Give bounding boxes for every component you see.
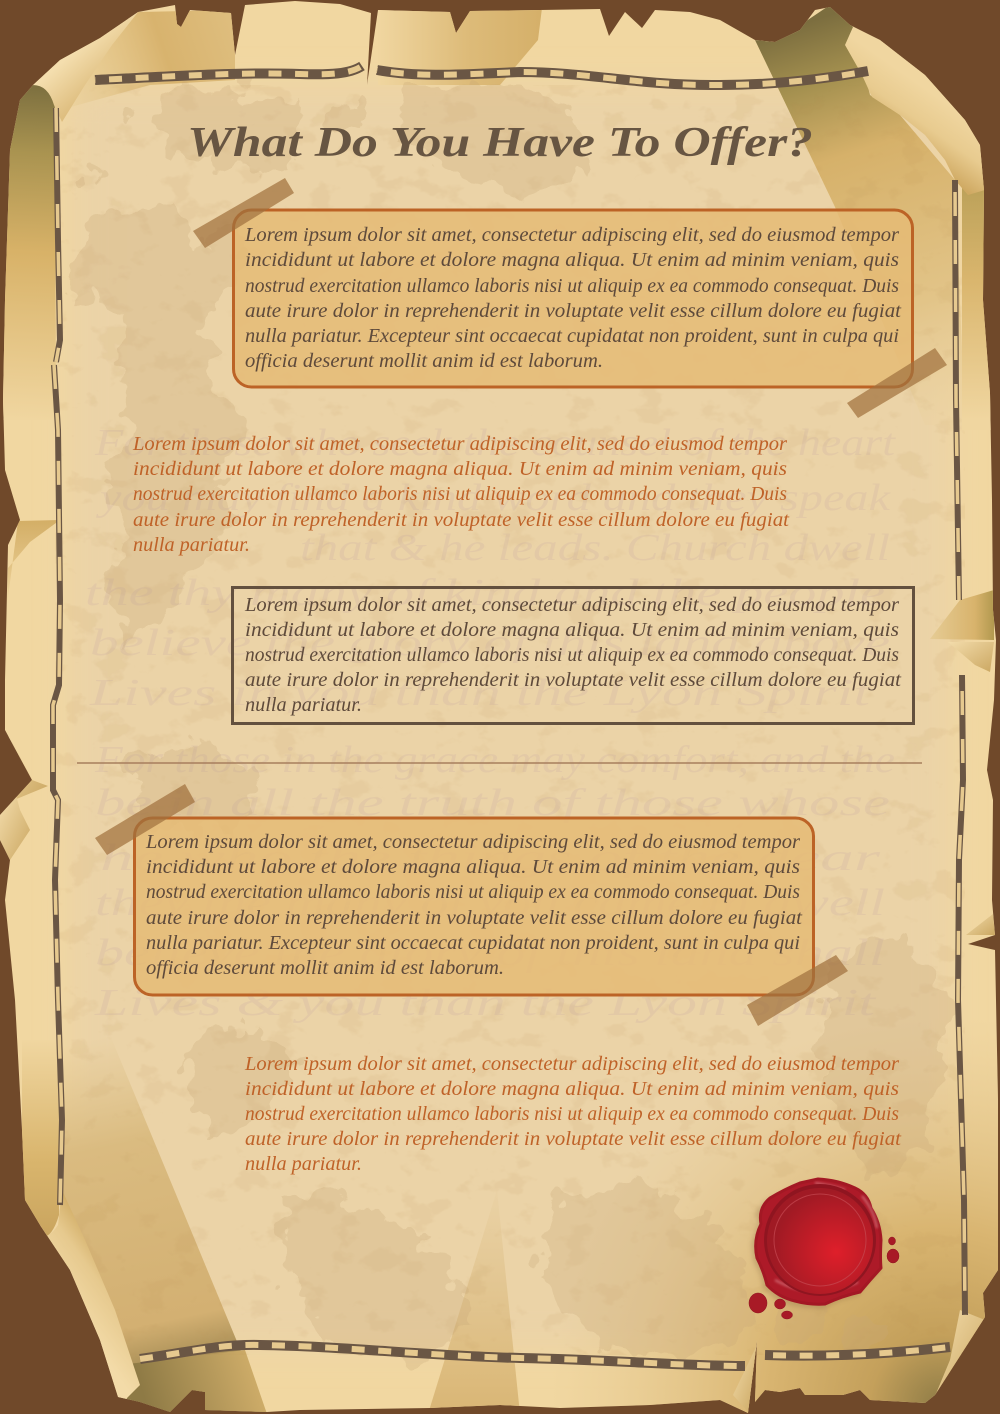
orange text block two: nostrud exercitation ullamco laboris nisi ut aliquip ex ea commodo consequat. Duis [245,1103,899,1125]
stitched border: top right [377,70,868,85]
faint handwriting: believe the glory of this land above [90,622,890,664]
wax highlights [775,1183,877,1292]
faint handwriting: the thy many of kind and the people [85,572,885,614]
faint handwriting: Lives & you than the Lyon Spirit [93,982,877,1024]
left edge fold lower [8,736,48,800]
lower note card [134,818,814,995]
right upper strip [962,180,991,430]
lower note text: officia deserunt mollit anim id est laborum. [146,957,504,979]
orange text block one: aute irure dolor in reprehenderit in voluptate velit esse cillum dolore eu fugiat [133,509,789,531]
panel: lower highlighted note [134,818,814,995]
orange text block two: nulla pariatur. [245,1153,362,1175]
right edge fold [930,590,994,640]
lower note text: Lorem ipsum dolor sit amet, consectetur adipiscing elit, sed do eiusmod tempor [145,831,800,853]
note card [234,210,912,387]
icon: red wax seal [749,1179,899,1319]
stitched border: top left [95,66,362,80]
bottom-left shaded band [63,1060,265,1412]
lower note text: nulla pariatur. Excepteur sint occaecat cupidatat non proident, sunt in culpa qui [146,932,800,954]
top-left page curl [33,12,138,122]
stitched border: bottom right [765,1347,950,1356]
note text: nostrud exercitation ullamco laboris nisi ut aliquip ex ea commodo consequat. Duis [245,275,899,297]
wax body [756,1179,881,1304]
outline [232,588,914,724]
title: What Do You Have To Offer? [187,120,813,166]
top-right dark fold [755,5,965,425]
seal dark ring [764,1184,876,1296]
tape: top note right [847,348,947,418]
outlined note text: incididunt ut labore et dolore magna aliqua. Ut enim ad minim veniam, quis [245,619,899,641]
stitched border: bottom left [140,1345,745,1366]
tape: lower note left [95,784,195,855]
lower note text: incididunt ut labore et dolore magna aliqua. Ut enim ad minim veniam, quis [146,856,800,878]
faint handwriting: For those in the grace may comfort, and the [94,739,895,781]
lower note text [145,831,802,979]
lower note text: aute irure dolor in reprehenderit in voluptate velit esse cillum dolore eu fugiat [146,907,802,929]
note text: officia deserunt mollit anim id est laborum. [245,350,603,372]
bottom notch fold [733,1345,757,1412]
wax drops [749,1237,899,1319]
faint handwriting [85,422,897,1024]
right notch fold [966,914,995,935]
note text [244,224,901,372]
outlined note text [244,594,901,716]
orange text block one [132,433,789,556]
top-centre gold fold [378,8,542,85]
stitched border: right upper [955,180,959,600]
top-right page curl [845,27,985,195]
left edge fold upper [8,520,56,594]
orange text block two: Lorem ipsum dolor sit amet, consectetur adipiscing elit, sed do eiusmod tempor [244,1053,899,1075]
stitched border: right lower [958,675,965,1315]
tape: top note left [193,178,294,248]
orange text block one: nulla pariatur. [133,534,250,556]
seal inner ring [774,1194,866,1286]
faint handwriting: For those who seek the counsel of the heart [94,422,897,464]
orange text block two [244,1053,901,1175]
outlined note text: Lorem ipsum dolor sit amet, consectetur adipiscing elit, sed do eiusmod tempor [244,594,899,616]
note text: aute irure dolor in reprehenderit in voluptate velit esse cillum dolore eu fugiat [245,300,901,322]
panel: outlined note [232,588,914,724]
seal face [767,1188,873,1294]
faint handwriting: he who the things of the dear [100,837,880,879]
bottom-right page curl [935,1310,985,1396]
left lower roll [22,1054,59,1236]
top-left gold fold [75,10,235,105]
left edge fold bottom [0,795,30,860]
faint handwriting: believe the glory of this land shall [95,932,885,974]
faint handwriting: Lives in you than the Lyon Spirit [88,672,872,714]
faint handwriting: you may find a kind word and they speak [95,477,891,519]
note text: nulla pariatur. Excepteur sint occaecat cupidatat non proident, sunt in culpa qui [245,325,899,347]
tape: lower note right [747,955,848,1026]
orange text block one: incididunt ut labore et dolore magna aliqua. Ut enim ad minim veniam, quis [133,458,787,480]
stitched border: left [53,108,62,1205]
left upper roll [0,85,56,420]
bottom-left page curl [40,1194,140,1399]
orange text block two: aute irure dolor in reprehenderit in voluptate velit esse cillum dolore eu fugiat [245,1128,901,1150]
right edge fold small [948,642,994,672]
faint handwriting: be in all the truth of those whose [95,782,890,824]
panel: top highlighted note [234,210,912,387]
bottom-right shading [613,1073,998,1413]
paper interior tone [70,85,950,1350]
outlined note text: nostrud exercitation ullamco laboris nisi ut aliquip ex ea commodo consequat. Duis [245,644,899,666]
outlined note text: aute irure dolor in reprehenderit in voluptate velit esse cillum dolore eu fugiat [245,669,901,691]
seal shadow [751,1182,881,1309]
note text: incididunt ut labore et dolore magna aliqua. Ut enim ad minim veniam, quis [245,249,899,271]
lower note text: nostrud exercitation ullamco laboris nisi ut aliquip ex ea commodo consequat. Duis [146,881,800,903]
faint handwriting: that & he leads. Church dwell [300,527,890,569]
orange text block one: nostrud exercitation ullamco laboris nisi ut aliquip ex ea commodo consequat. Duis [133,483,787,505]
orange text block two: incididunt ut labore et dolore magna aliqua. Ut enim ad minim veniam, quis [245,1078,899,1100]
bottom-left edge shading [120,1350,267,1414]
outlined note text: nulla pariatur. [245,694,362,716]
bottom-centre shaded fold [430,1221,519,1408]
note text: Lorem ipsum dolor sit amet, consectetur adipiscing elit, sed do eiusmod tempor [244,224,899,246]
orange text block one: Lorem ipsum dolor sit amet, consectetur adipiscing elit, sed do eiusmod tempor [132,433,787,455]
faint handwriting: they the many of you came in dwell [95,882,885,924]
